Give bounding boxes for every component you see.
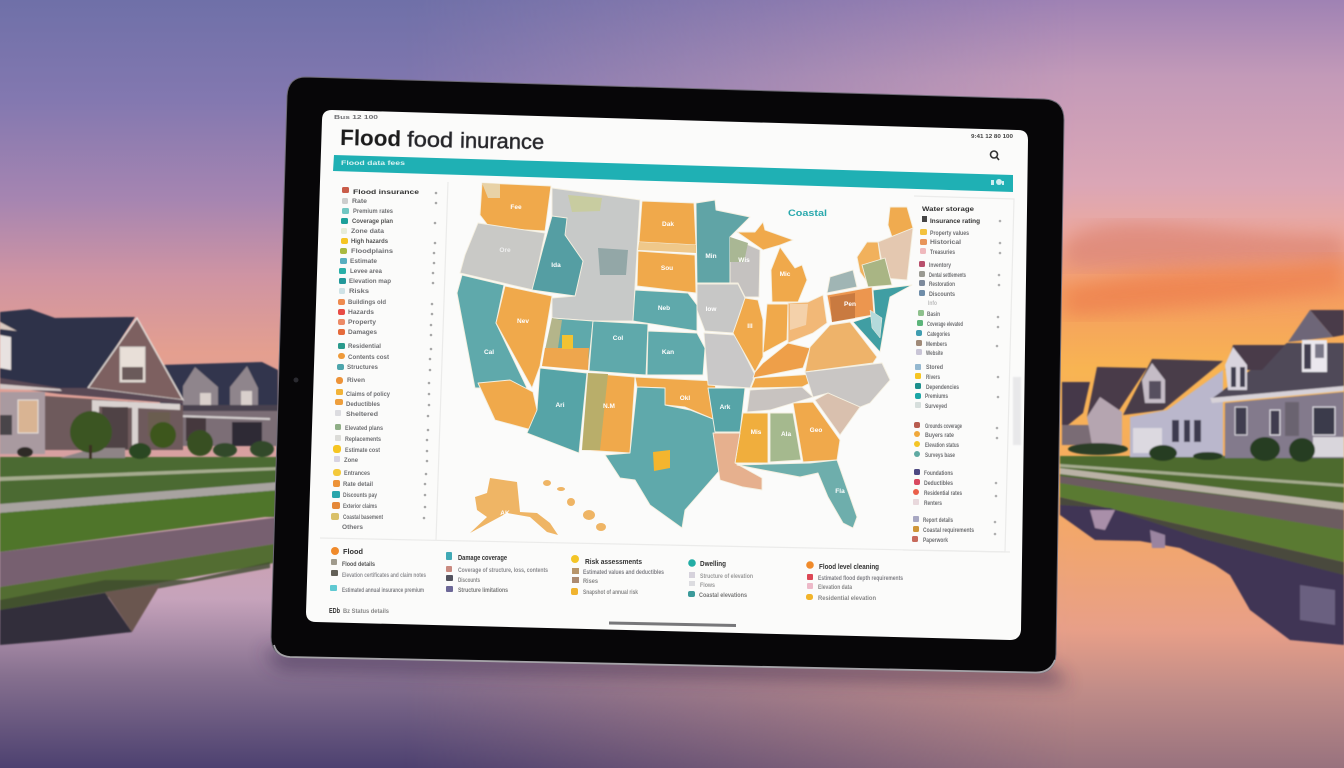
right list labels: Report details	[923, 518, 953, 524]
left list labels: Entrances	[344, 471, 371, 477]
legend group: risk assessment: Snapshot of annual risk	[583, 590, 639, 596]
legend group: flood cleaning: Estimated flood depth requirements	[818, 576, 904, 582]
map small title: Coastal	[788, 208, 827, 218]
map state labels: Ala	[781, 431, 791, 438]
map state labels: Ark	[720, 404, 731, 411]
right list labels: Website	[926, 351, 943, 357]
left list labels: Estimate	[350, 259, 378, 265]
left list dots	[423, 192, 437, 519]
legend group: risk assessment: Risk assessments	[585, 559, 642, 566]
southwest	[527, 318, 635, 453]
map state labels: Kan	[662, 349, 674, 356]
footer note: Bz Status details	[343, 609, 390, 615]
right list labels: Coastal requirements	[923, 528, 975, 534]
left list labels: Replacements	[345, 437, 382, 443]
right list labels: Elevation status	[925, 443, 959, 449]
left list labels: Coverage plan	[352, 219, 393, 225]
panel: bottom legend	[329, 547, 904, 615]
teal header bar: Flood data fees	[341, 161, 406, 167]
right list labels: Members	[926, 342, 948, 348]
right list labels: Rivers	[926, 375, 940, 381]
great lakes and Ohio valley	[733, 295, 877, 388]
right list heading	[922, 206, 980, 225]
legend group: flood cleaning	[806, 561, 904, 602]
main house, left	[0, 309, 274, 459]
left list labels: Damages	[348, 330, 378, 336]
left list labels: Zone data	[351, 229, 385, 235]
left list labels: Floodplains	[351, 249, 394, 255]
left list labels: Sheltered	[346, 412, 378, 418]
right list labels: Stored	[926, 365, 943, 371]
legend group: risk assessment: Rises	[583, 579, 599, 585]
map state labels: Wis	[738, 257, 750, 264]
right list heading: Water storage	[922, 206, 974, 213]
left list labels: High hazards	[351, 239, 389, 245]
map state labels	[484, 204, 856, 517]
legend group: dwelling: Coastal elevations	[699, 593, 748, 599]
left list labels: Estimate cost	[345, 448, 380, 454]
title: Flood	[340, 125, 401, 151]
right list labels: Surveys base	[925, 453, 956, 459]
panel: right legend list	[912, 206, 1021, 544]
right list labels: Surveyed	[925, 404, 947, 410]
map state labels: Min	[705, 253, 717, 260]
right list labels: Premiums	[925, 394, 949, 400]
left list labels: Rate detail	[343, 482, 373, 488]
left list labels: Claims of policy	[346, 392, 391, 398]
map state labels: Geo	[810, 427, 822, 434]
left list labels: Others	[342, 525, 364, 531]
right list labels: Grounds coverage	[925, 424, 962, 430]
legend group: damage coverage: Damage coverage	[458, 555, 507, 562]
right list labels: Renters	[924, 501, 943, 507]
left list labels: Riven	[347, 378, 365, 384]
legend group: damage coverage	[446, 552, 549, 594]
legend group: damage coverage: Discounts	[458, 578, 480, 584]
legend group: damage coverage: Structure limitations	[458, 588, 509, 594]
map state labels: Mic	[780, 271, 791, 278]
right list dots	[994, 220, 1001, 535]
legend group: flood: Elevation certificates and claim notes	[342, 573, 427, 579]
right list labels: Residential rates	[924, 491, 963, 497]
left list labels: Zone	[344, 458, 359, 464]
map state labels: Pen	[844, 301, 856, 308]
teal header bar	[333, 155, 1013, 192]
right list labels: Buyers rate	[925, 433, 955, 439]
map state labels: Dak	[662, 221, 674, 228]
title	[340, 125, 544, 154]
screen	[306, 110, 1028, 640]
legend group: risk assessment	[571, 555, 665, 596]
right scene: houses, lawns and reflection	[1060, 310, 1344, 645]
map state labels: Fla	[835, 488, 845, 495]
west coast	[457, 275, 552, 430]
map state labels: Iow	[706, 306, 717, 313]
left list labels: Levee area	[350, 269, 383, 275]
US choropleth map	[457, 183, 913, 535]
legend group: dwelling: Flows	[700, 583, 716, 589]
left lawn and paths	[0, 457, 280, 645]
tablet shadow	[262, 650, 1070, 684]
right list labels: Dental settlements	[929, 273, 966, 279]
left list labels: Coastal basement	[343, 515, 383, 521]
panel: left legend list	[331, 187, 437, 531]
map state labels: Nev	[517, 318, 529, 325]
left list labels: Exterior claims	[343, 504, 378, 510]
right list labels: Info	[928, 301, 937, 307]
panel dividers	[320, 182, 1014, 552]
left list labels: Property	[348, 320, 377, 326]
legend group: flood cleaning: Residential elevation	[818, 596, 876, 602]
left list labels: Risks	[349, 289, 370, 295]
southeast	[708, 363, 890, 528]
tablet screen content	[320, 115, 1021, 627]
legend group: dwelling: Dwelling	[700, 561, 726, 568]
central states	[589, 201, 720, 528]
legend group: dwelling: Structure of elevation	[700, 574, 753, 580]
tablet device	[271, 77, 1064, 673]
right list labels: Discounts	[929, 292, 956, 298]
left list labels: Elevated plans	[345, 426, 384, 432]
right list heading: Insurance rating	[930, 218, 980, 225]
right lawn, path and bank	[1060, 456, 1344, 645]
legend group: flood cleaning: Elevation data	[818, 585, 853, 591]
right list labels: Inventory	[929, 263, 952, 269]
map state labels: Ari	[555, 402, 565, 409]
left list labels: Hazards	[348, 310, 375, 316]
map state labels: Ida	[551, 262, 561, 269]
title: inurance	[460, 130, 544, 154]
map state labels: N.M	[603, 403, 615, 410]
left list labels: Flood insurance	[353, 189, 420, 196]
legend group: flood cleaning: Flood level cleaning	[819, 564, 879, 571]
legend group: flood: Flood	[343, 549, 363, 556]
northeast	[827, 207, 913, 352]
right list labels: Dependencies	[926, 385, 960, 391]
map state labels: Fee	[510, 204, 522, 211]
right list labels: Property values	[930, 231, 970, 237]
icon: search	[990, 151, 999, 160]
map state labels: Cal	[484, 349, 494, 356]
legend group: flood: Flood details	[342, 562, 376, 568]
footer note: EDb	[329, 608, 340, 615]
house row, right	[1062, 310, 1344, 462]
map state labels: Ill	[747, 323, 753, 330]
left list labels: Rate	[352, 199, 368, 205]
legend group: dwelling	[688, 559, 753, 599]
camera	[294, 378, 298, 382]
title: food	[407, 128, 453, 152]
left list labels: Deductibles	[346, 402, 381, 408]
map state labels: Col	[613, 335, 623, 342]
right list labels: Deductibles	[924, 481, 954, 487]
right list labels: Restoration	[929, 282, 955, 288]
right list labels: Basin	[927, 312, 940, 318]
legend group: flood	[330, 547, 427, 594]
right list labels: Paperwork	[923, 538, 949, 544]
left scene: houses, lawns and reflection	[0, 309, 280, 645]
northwest states	[460, 183, 640, 321]
left list labels: Elevation map	[349, 279, 391, 285]
right list labels: Coverage elevated	[927, 322, 963, 328]
screen edge glare	[1013, 377, 1021, 445]
Alaska and Hawaii	[470, 478, 606, 535]
status bar: 9:41 12 80 100	[971, 134, 1013, 140]
left list labels	[342, 189, 420, 531]
left list labels: Buildings old	[348, 300, 386, 306]
map state labels: Mis	[751, 429, 762, 436]
footer note	[329, 608, 390, 615]
right list labels	[923, 231, 975, 544]
legend group: flood: Estimated annual insurance premium	[342, 588, 424, 594]
right list labels: Foundations	[924, 471, 954, 477]
map state labels: AK	[500, 510, 510, 517]
home indicator bar	[609, 622, 736, 627]
icon: cloud	[991, 179, 1004, 185]
right list labels: Historical	[930, 240, 961, 246]
right list swatches	[912, 229, 927, 542]
status bar	[334, 115, 1013, 140]
map state labels: Okl	[680, 395, 690, 402]
left list labels: Structures	[347, 365, 379, 371]
second house, left	[160, 362, 278, 446]
upper midwest	[696, 200, 807, 388]
map state labels: Sou	[661, 265, 673, 272]
left list labels: Premium rates	[353, 209, 394, 215]
left list labels: Residential	[348, 344, 381, 350]
left list labels: Contents cost	[348, 355, 389, 361]
legend group: risk assessment: Estimated values and deductibles	[583, 570, 665, 576]
legend group: damage coverage: Coverage of structure, loss, contents	[458, 568, 549, 574]
left list labels: Discounts pay	[343, 493, 378, 499]
map state labels: Neb	[658, 305, 670, 312]
right list labels: Categories	[927, 332, 950, 338]
status bar: Bus 12 100	[334, 115, 378, 121]
map state labels: Ore	[499, 247, 511, 254]
right list labels: Treasuries	[930, 250, 956, 256]
left list swatches	[331, 187, 349, 520]
